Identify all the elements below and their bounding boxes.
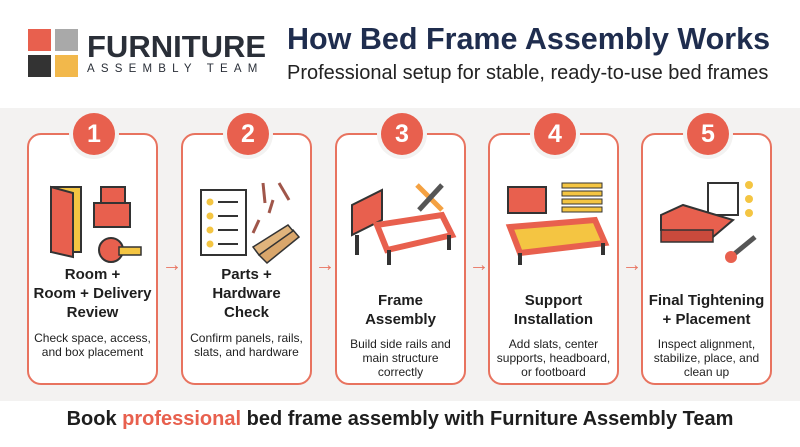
logo: ASSEMBLY TEAM [87, 63, 263, 75]
card 1: Review [67, 304, 118, 321]
card 4: Support [525, 292, 582, 309]
card 2: slats, and hardware [194, 345, 299, 359]
card 5: + Placement [663, 311, 750, 328]
logo [28, 29, 266, 77]
card 2 [181, 133, 312, 385]
card 2: 2 [241, 120, 255, 148]
text: → [469, 254, 489, 276]
card 2: Confirm panels, rails, [190, 331, 303, 345]
card 5 [641, 133, 772, 385]
card 2: Check [224, 304, 269, 321]
card 3: main structure [362, 351, 439, 365]
icon: door boxes tape [50, 186, 142, 263]
card 3 [335, 133, 466, 385]
card 2: Parts + [221, 266, 272, 283]
card 4: or footboard [521, 365, 586, 379]
card 3: Assembly [365, 311, 436, 328]
card 1: 1 [87, 120, 101, 148]
icon: slats install [506, 182, 610, 265]
card 4 [488, 133, 619, 385]
card 3: correctly [378, 365, 423, 379]
card 3: 3 [395, 120, 409, 148]
icon: checklist screws wood [200, 182, 300, 264]
card 3: Build side rails and [350, 337, 451, 351]
card 5: 5 [701, 120, 715, 148]
card 5: stabilize, place, and [654, 351, 759, 365]
icon: bed frame tools [351, 183, 456, 265]
card 5: Final Tightening [649, 292, 764, 309]
card 5: clean up [684, 365, 729, 379]
card 1 [27, 133, 158, 385]
card 4: Add slats, center [509, 337, 598, 351]
text: → [162, 254, 182, 276]
card 1: Check space, access, [34, 331, 151, 345]
subtitle: Professional setup for stable, ready-to-use bed frames [287, 62, 768, 84]
logo: FURNITURE [87, 29, 266, 64]
card 3: Frame [378, 292, 423, 309]
text: → [622, 254, 642, 276]
card 1: and box placement [42, 345, 143, 359]
card 4: supports, headboard, [497, 351, 610, 365]
card 5: Inspect alignment, [658, 337, 755, 351]
card 4: 4 [548, 120, 562, 148]
card 4: Installation [514, 311, 593, 328]
title: How Bed Frame Assembly Works [287, 22, 770, 56]
text: → [315, 254, 335, 276]
card 1: Room + [65, 266, 120, 283]
card 1: Room + Delivery [34, 285, 151, 302]
icon: bedroom placement [660, 181, 756, 263]
card 2: Hardware [212, 285, 281, 302]
footer call to action: Book professional bed frame assembly with Furniture Assembly Team [67, 408, 733, 430]
